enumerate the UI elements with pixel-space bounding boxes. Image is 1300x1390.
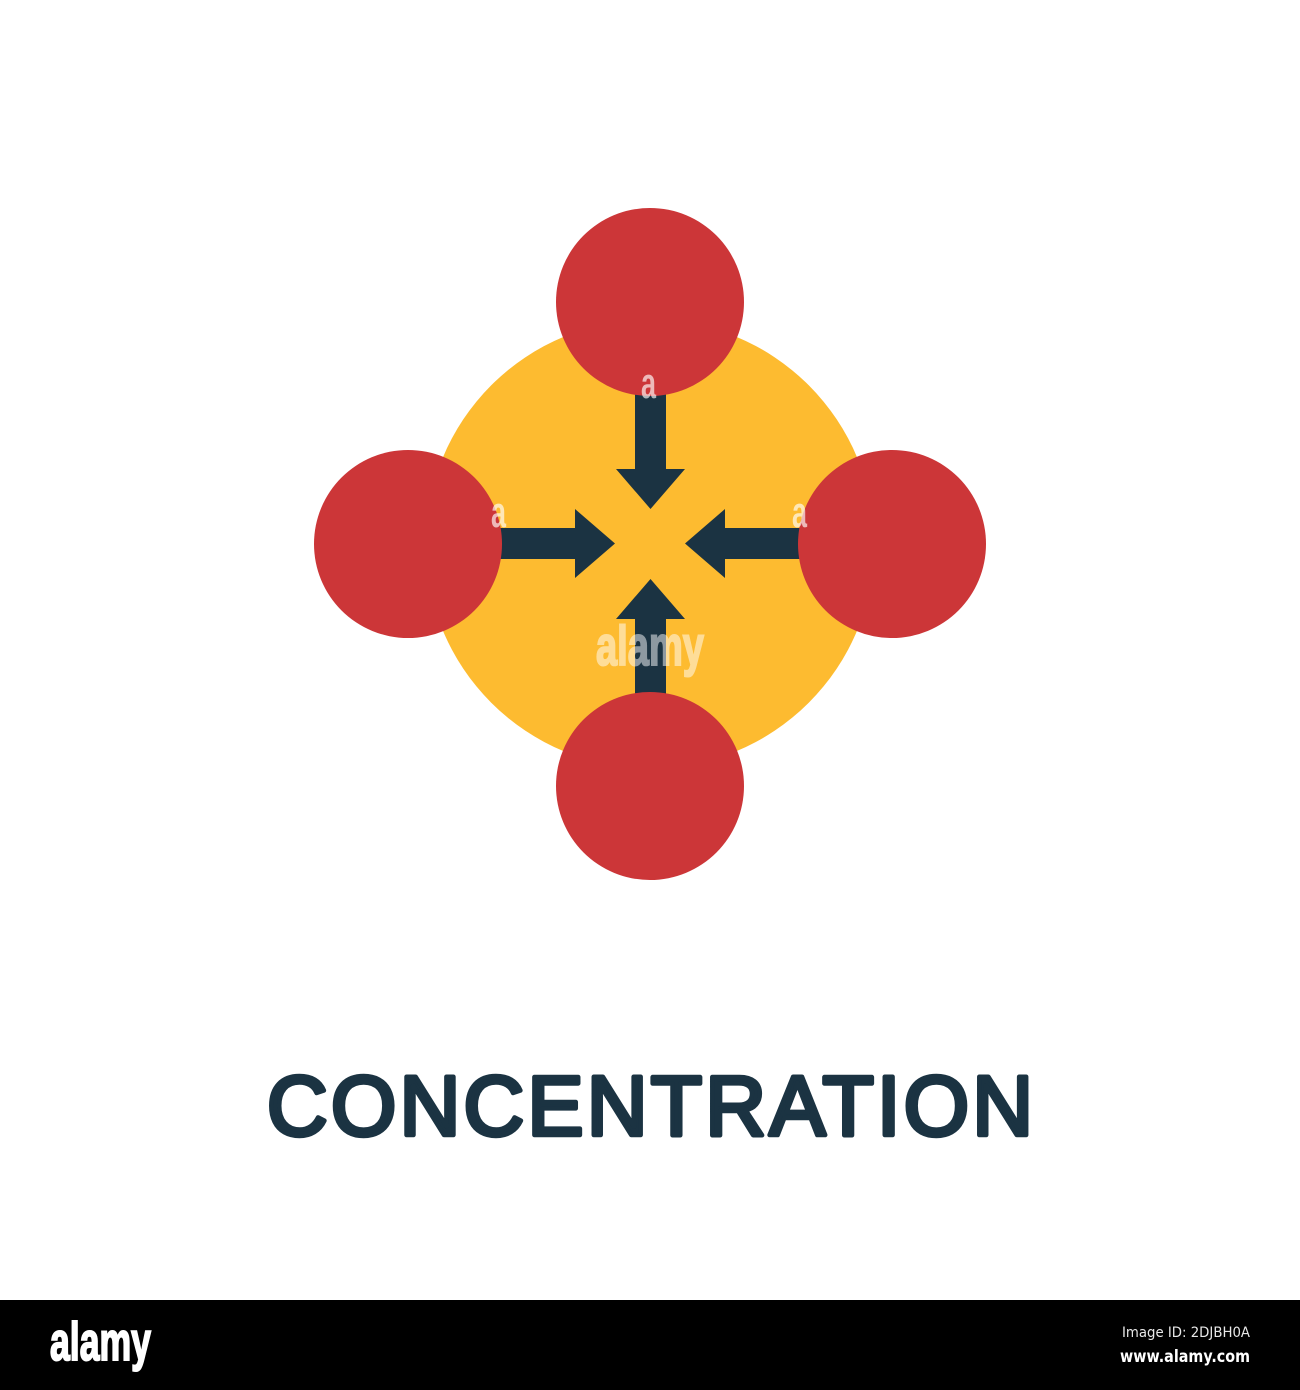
red circle: right — [798, 450, 986, 638]
watermark: left letter: a — [491, 488, 506, 537]
watermark: right letter: a — [792, 488, 807, 537]
footer bar — [0, 1300, 1300, 1390]
red circle: left — [314, 450, 502, 638]
website: www.alamy.com — [1120, 1347, 1250, 1367]
arrow: from right pointing to centre — [685, 509, 805, 578]
title: CONCENTRATION — [267, 1059, 1033, 1153]
red circle: top — [556, 208, 744, 396]
footer logo: alamy — [50, 1312, 151, 1372]
icon: concentration — [314, 208, 986, 880]
central yellow circle — [426, 320, 874, 768]
arrow: from bottom pointing to centre — [616, 579, 685, 698]
image id: Image ID: 2DJBH0A — [1122, 1325, 1250, 1341]
red circle: bottom — [556, 692, 744, 880]
watermark: centre alamy: alamy — [596, 614, 704, 677]
arrow: from top pointing to centre — [616, 390, 685, 509]
arrow: from left pointing to centre — [495, 509, 615, 578]
watermark: top letter: a — [641, 359, 656, 408]
